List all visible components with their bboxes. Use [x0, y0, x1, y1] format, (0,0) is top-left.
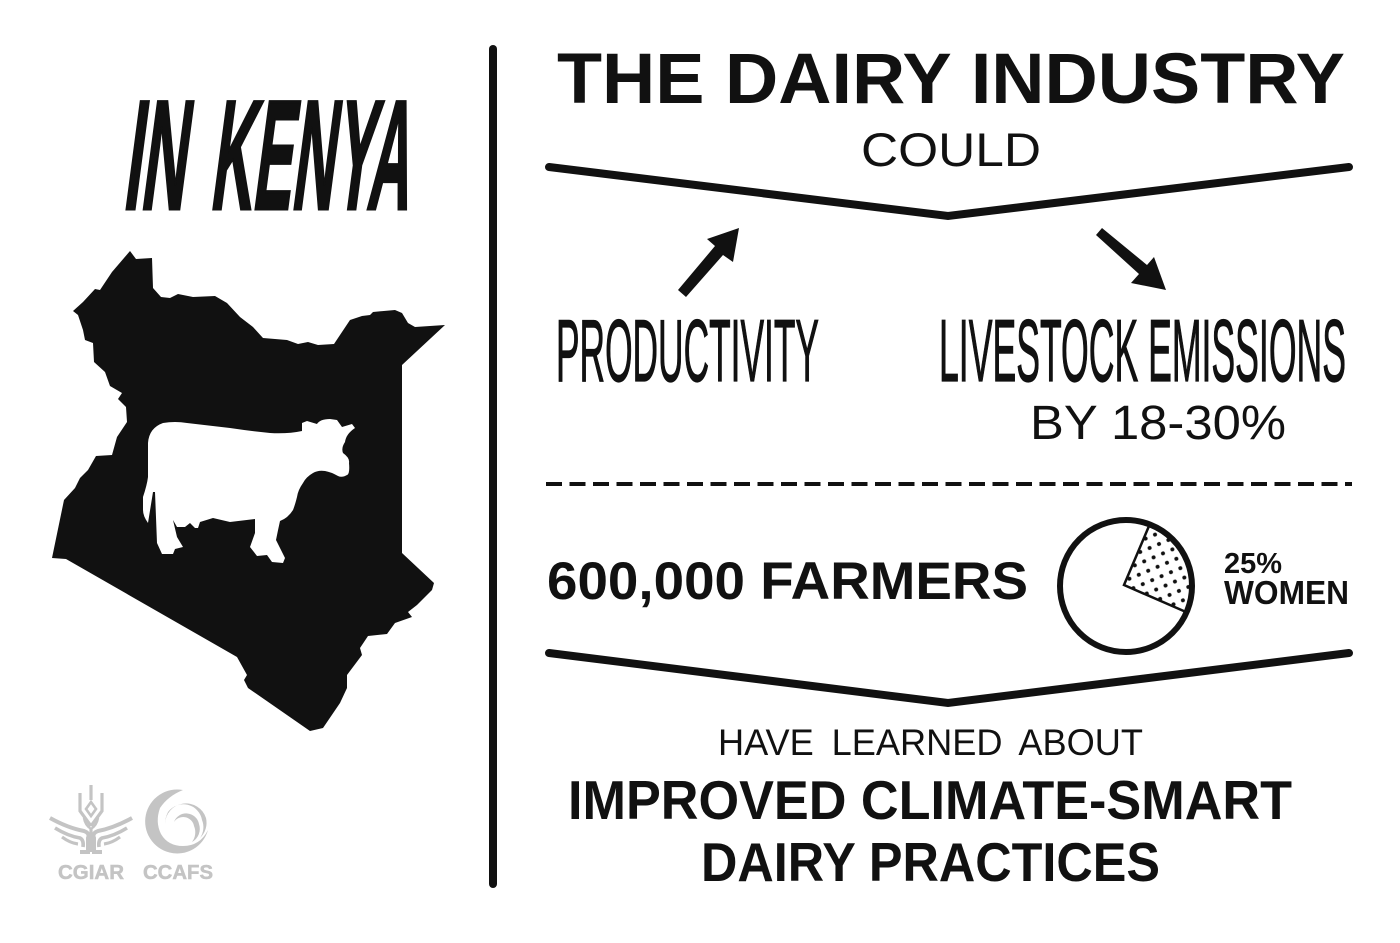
stat: 600,000 farmers: 600,000 FARMERS: [547, 552, 1028, 611]
label: 25% women: [1224, 548, 1349, 611]
pie chart: 25% women: [1060, 520, 1192, 652]
logos: [50, 785, 213, 884]
map silhouette: [52, 251, 445, 731]
icon: cow: [143, 419, 355, 563]
arrow down: [1096, 228, 1166, 290]
logo: CGIAR: CGIAR: [58, 862, 125, 884]
infographic: KENYA: [205, 69, 426, 243]
text: have learned about: HAVE LEARNED ABOUT: [718, 722, 1143, 763]
chevron divider bottom: [549, 653, 1349, 703]
label: 25% women: WOMEN: [1224, 574, 1349, 611]
logo: CCAFS: [143, 789, 213, 884]
label: 25% women: 25%: [1224, 548, 1282, 580]
heading: improved climate-smart dairy practices: [568, 769, 1292, 893]
logo: CCAFS: CCAFS: [143, 862, 213, 884]
arrow up: [678, 228, 739, 297]
label: by 18-30%: BY 18-30%: [1030, 397, 1286, 450]
heading: in Kenya: IN: [118, 69, 202, 243]
text: could: COULD: [861, 123, 1041, 176]
map of Kenya with cow: [52, 251, 445, 731]
infographic: PRODUCTIVITY: [556, 301, 819, 400]
heading: improved climate-smart dairy practices: DAIRY PRACTICES: [701, 831, 1160, 893]
chevron divider top: [549, 167, 1349, 216]
dashed divider: [546, 482, 1352, 486]
heading: the dairy industry: THE DAIRY INDUSTRY: [557, 40, 1345, 119]
heading: improved climate-smart dairy practices: IMPROVED CLIMATE-SMART: [568, 769, 1292, 831]
heading: in Kenya: [118, 69, 426, 243]
vertical divider: [489, 49, 497, 884]
logo: CGIAR: [50, 785, 132, 884]
